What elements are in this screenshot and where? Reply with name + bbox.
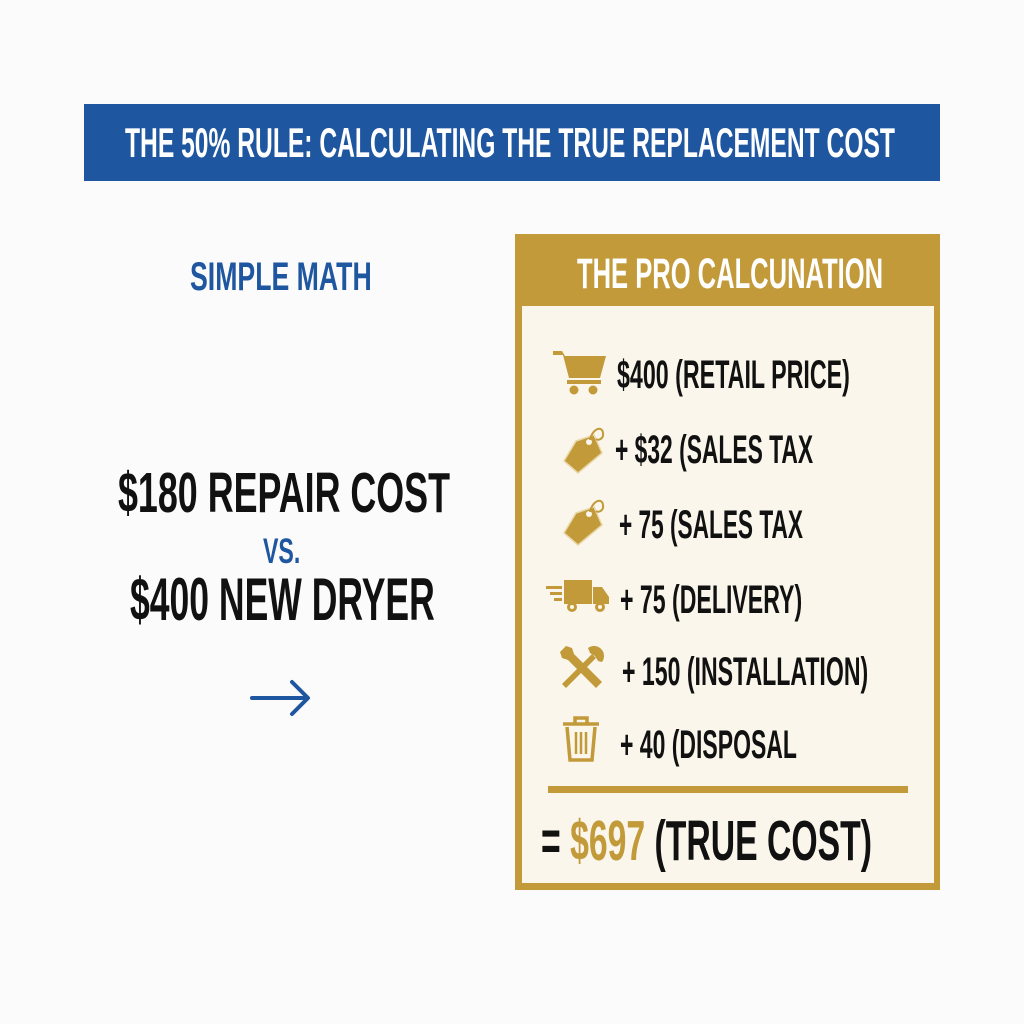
vs text: VS. — [263, 532, 300, 571]
row 5 text: + 150 (INSTALLATION) — [622, 650, 868, 694]
left heading: simple math: SIMPLE MATH — [190, 255, 372, 299]
row 4 text: + 75 (DELIVERY) — [620, 578, 802, 622]
panel body — [522, 306, 934, 883]
row 2 text: + $32 (SALES TAX — [615, 428, 813, 472]
panel header text: THE PRO CALCUNATION — [577, 250, 883, 298]
icon: tag 1 — [563, 428, 604, 474]
arrow — [250, 680, 310, 716]
repair cost line: $180 REPAIR COST — [118, 461, 450, 525]
icon: tag 2 — [563, 500, 604, 546]
panel: pro calculation — [515, 234, 940, 890]
title text: THE 50% RULE: CALCULATING THE TRUE REPLACEMENT COST — [125, 119, 895, 166]
icon: cart — [553, 351, 606, 394]
title banner — [84, 104, 940, 181]
row 1 text: $400 (RETAIL PRICE) — [617, 353, 850, 397]
icon: truck — [546, 580, 609, 612]
total divider — [548, 786, 908, 793]
total line: = $697 (TRUE COST) — [541, 809, 872, 873]
icon: trash — [563, 716, 599, 762]
row 3 text: + 75 (SALES TAX — [619, 503, 803, 547]
row 6 text: + 40 (DISPOSAL — [620, 723, 797, 767]
new dryer line: $400 NEW DRYER — [130, 566, 435, 633]
icon: tools — [560, 646, 604, 688]
